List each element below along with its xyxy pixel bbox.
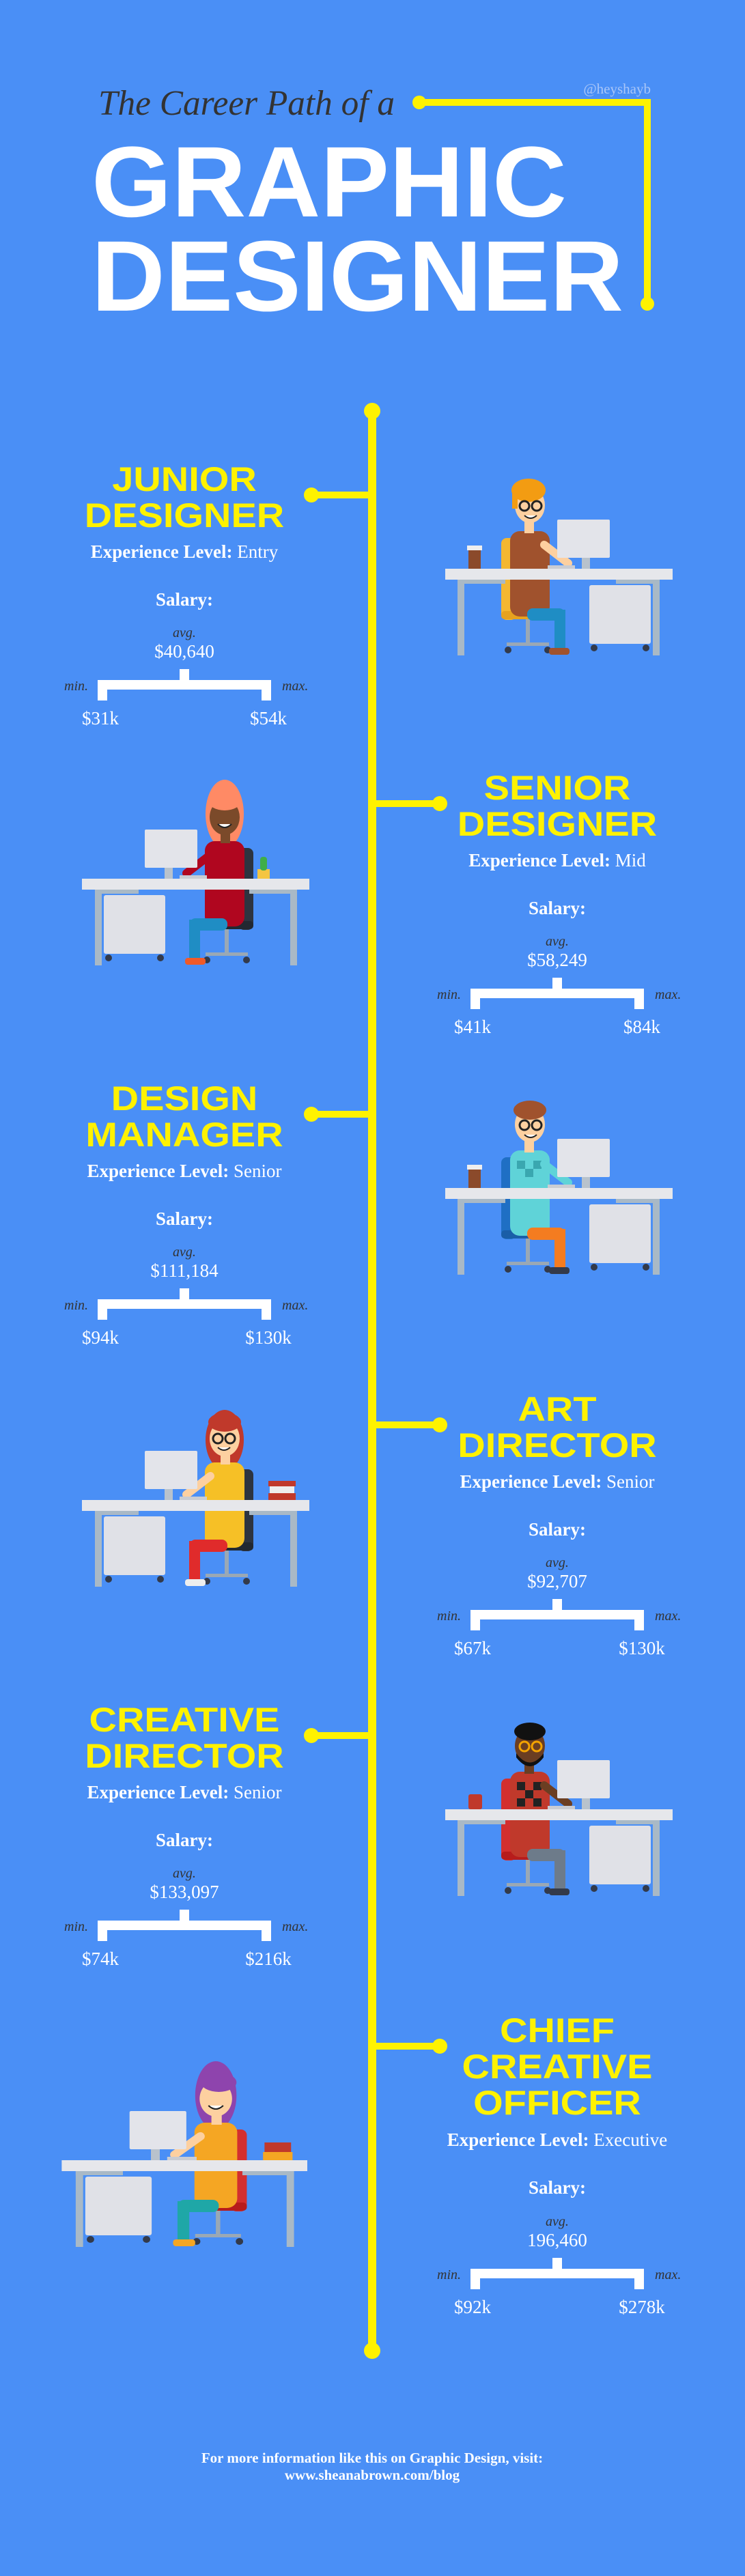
illustration: design manager at desk [445, 1101, 673, 1275]
panel: chief creative officer: $278k [619, 2297, 665, 2317]
panel: chief creative officer: Salary: [529, 2177, 586, 2198]
panel: junior designer: min. [64, 679, 88, 694]
panel: design manager: $94k [82, 1327, 119, 1348]
main title [92, 126, 623, 332]
panel: creative director: max. [282, 1919, 308, 1934]
footer [201, 2450, 543, 2483]
main title: DESIGNER [92, 221, 623, 332]
panel: creative director: min. [64, 1919, 88, 1934]
panel: chief creative officer: min. [437, 2267, 461, 2282]
panel: creative director: $216k [245, 1949, 292, 1969]
panel: chief creative officer: $92k [454, 2297, 492, 2317]
illustration: creative director at desk [445, 1723, 673, 1896]
panel: design manager: max. [282, 1298, 308, 1313]
panel: art director: $130k [619, 1638, 665, 1658]
panel: senior designer [437, 769, 681, 1037]
panel: design manager: min. [64, 1298, 88, 1313]
panel: junior designer: Experience Level: Entry [91, 541, 279, 562]
panel: creative director [64, 1701, 308, 1969]
panel: senior designer: $41k [454, 1017, 492, 1037]
panel: chief creative officer: max. [655, 2267, 681, 2282]
panel: chief creative officer: avg. [546, 2214, 569, 2229]
panel: senior designer: $84k [623, 1017, 661, 1037]
panel: art director: $67k [454, 1638, 492, 1658]
panel: art director: min. [437, 1609, 461, 1624]
illustration: chief creative officer at desk [61, 2061, 307, 2247]
panel: senior designer: Experience Level: Mid [468, 850, 646, 871]
timeline spine [304, 403, 447, 2359]
panel: art director: avg. [546, 1555, 569, 1570]
panel: chief creative officer: Experience Level: Executive [447, 2129, 667, 2150]
panel: senior designer: avg. [546, 934, 569, 949]
panel: design manager [64, 1080, 308, 1348]
footer: For more information like this on Graphic Design, visit: [201, 2450, 543, 2466]
panel: creative director: $74k [82, 1949, 119, 1969]
panel: design manager: DESIGN [111, 1080, 257, 1118]
panel: creative director: Experience Level: Senior [87, 1782, 281, 1802]
panel: chief creative officer: 196,460 [527, 2230, 587, 2250]
panel: design manager: $130k [245, 1327, 292, 1348]
panel: junior designer [64, 461, 308, 728]
panel: art director: max. [655, 1609, 681, 1624]
panel: junior designer: avg. [173, 625, 196, 640]
panel: senior designer: Salary: [529, 898, 586, 918]
illustration: junior designer at desk [445, 479, 673, 655]
panel: chief creative officer: CREATIVE [462, 2048, 652, 2086]
illustration: senior designer at desk [82, 780, 309, 965]
main title: GRAPHIC [92, 126, 567, 238]
panel: art director: ART [518, 1391, 597, 1428]
illustration: art director at desk [82, 1410, 309, 1587]
panel: art director [437, 1391, 681, 1658]
panel: senior designer: DESIGNER [458, 806, 657, 843]
panel: creative director: $133,097 [150, 1882, 219, 1902]
panel: junior designer: DESIGNER [85, 497, 284, 535]
panel: art director: Experience Level: Senior [460, 1471, 654, 1492]
panel: art director: DIRECTOR [458, 1427, 657, 1464]
panel: art director: $92,707 [527, 1571, 587, 1591]
panel: senior designer: min. [437, 987, 461, 1002]
panel: junior designer: $54k [250, 708, 287, 728]
panel: junior designer: JUNIOR [112, 461, 257, 498]
panel: creative director: Salary: [156, 1830, 213, 1850]
panel: chief creative officer [437, 2012, 681, 2317]
panel: chief creative officer: OFFICER [473, 2084, 641, 2122]
header [92, 81, 654, 332]
handle: @heyshayb [583, 81, 651, 97]
panel: senior designer: SENIOR [484, 769, 630, 807]
footer: www.sheanabrown.com/blog [285, 2467, 460, 2483]
panel: design manager: Salary: [156, 1208, 213, 1229]
panel: junior designer: max. [282, 679, 308, 694]
subtitle: The Career Path of a [98, 84, 395, 123]
panel: chief creative officer: CHIEF [500, 2012, 615, 2050]
header connector line [412, 96, 654, 311]
panel: junior designer: Salary: [156, 589, 213, 610]
panel: design manager: Experience Level: Senior [87, 1161, 281, 1181]
panel: creative director: CREATIVE [89, 1701, 279, 1739]
panel: creative director: DIRECTOR [85, 1738, 284, 1775]
panel: design manager: $111,184 [150, 1260, 219, 1281]
panel: junior designer: $40,640 [154, 641, 214, 662]
panel: art director: Salary: [529, 1519, 586, 1540]
panel: design manager: MANAGER [85, 1116, 283, 1154]
panel: design manager: avg. [173, 1245, 196, 1260]
panel: senior designer: $58,249 [527, 950, 587, 970]
panel: senior designer: max. [655, 987, 681, 1002]
panel: junior designer: $31k [82, 708, 119, 728]
panel: creative director: avg. [173, 1866, 196, 1881]
